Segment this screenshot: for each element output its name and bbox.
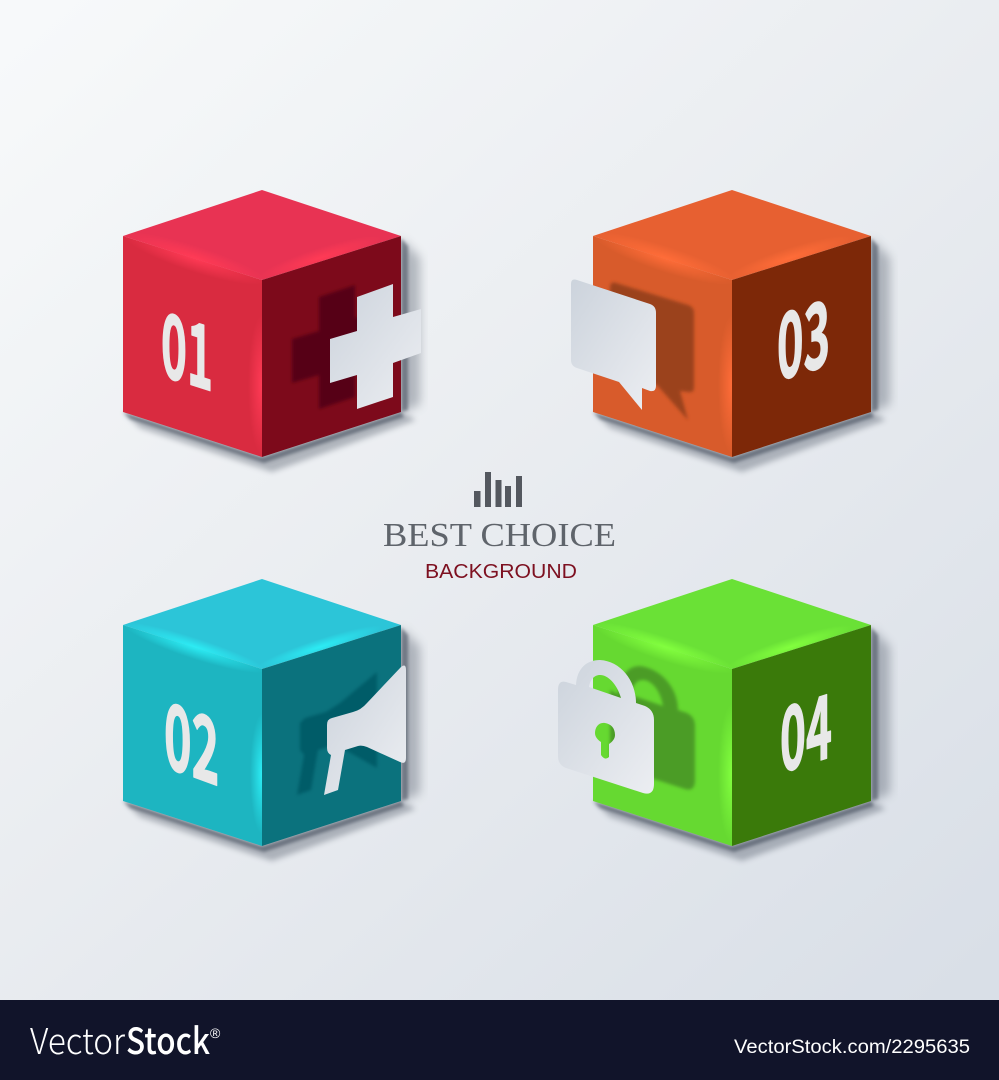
icon: cross xyxy=(330,284,421,409)
icon: megaphone xyxy=(324,666,406,795)
icon: padlock xyxy=(558,660,654,794)
cube 02 teal with megaphone icon xyxy=(120,579,420,861)
icon shadow: megaphone xyxy=(297,672,377,795)
cube 04 green with padlock icon xyxy=(558,579,890,861)
cube shadow xyxy=(593,238,890,472)
icon shadow: speech bubble xyxy=(610,283,694,420)
icon: speech bubble xyxy=(571,280,656,410)
number 03: 03 xyxy=(777,260,830,407)
cube shadow xyxy=(593,627,890,861)
cube faces xyxy=(589,190,871,457)
footer logo bold: Stock xyxy=(126,1013,210,1065)
cube faces xyxy=(589,579,871,846)
cube 01 red with cross icon xyxy=(119,190,421,472)
icon shadow: cross xyxy=(290,284,357,410)
icon: bar chart xyxy=(474,472,522,507)
number 04: 04 xyxy=(780,655,832,799)
cube faces xyxy=(120,579,401,846)
registered mark: ® xyxy=(210,1025,221,1041)
cube shadow xyxy=(123,627,420,861)
cube faces xyxy=(119,190,401,457)
cube 03 orange with speech bubble icon xyxy=(571,190,890,472)
cube shadow xyxy=(123,238,420,472)
center title block xyxy=(383,472,616,583)
footer id: VectorStock.com/2295635 xyxy=(734,1036,970,1058)
number 02: 02 xyxy=(164,662,219,812)
icon shadow: padlock xyxy=(610,666,695,790)
heading: BEST CHOICE xyxy=(383,517,616,554)
footer logo: Vector xyxy=(30,1013,126,1065)
number 01: 01 xyxy=(161,274,213,418)
subheading: BACKGROUND xyxy=(425,561,577,583)
footer bar xyxy=(0,1000,999,1080)
